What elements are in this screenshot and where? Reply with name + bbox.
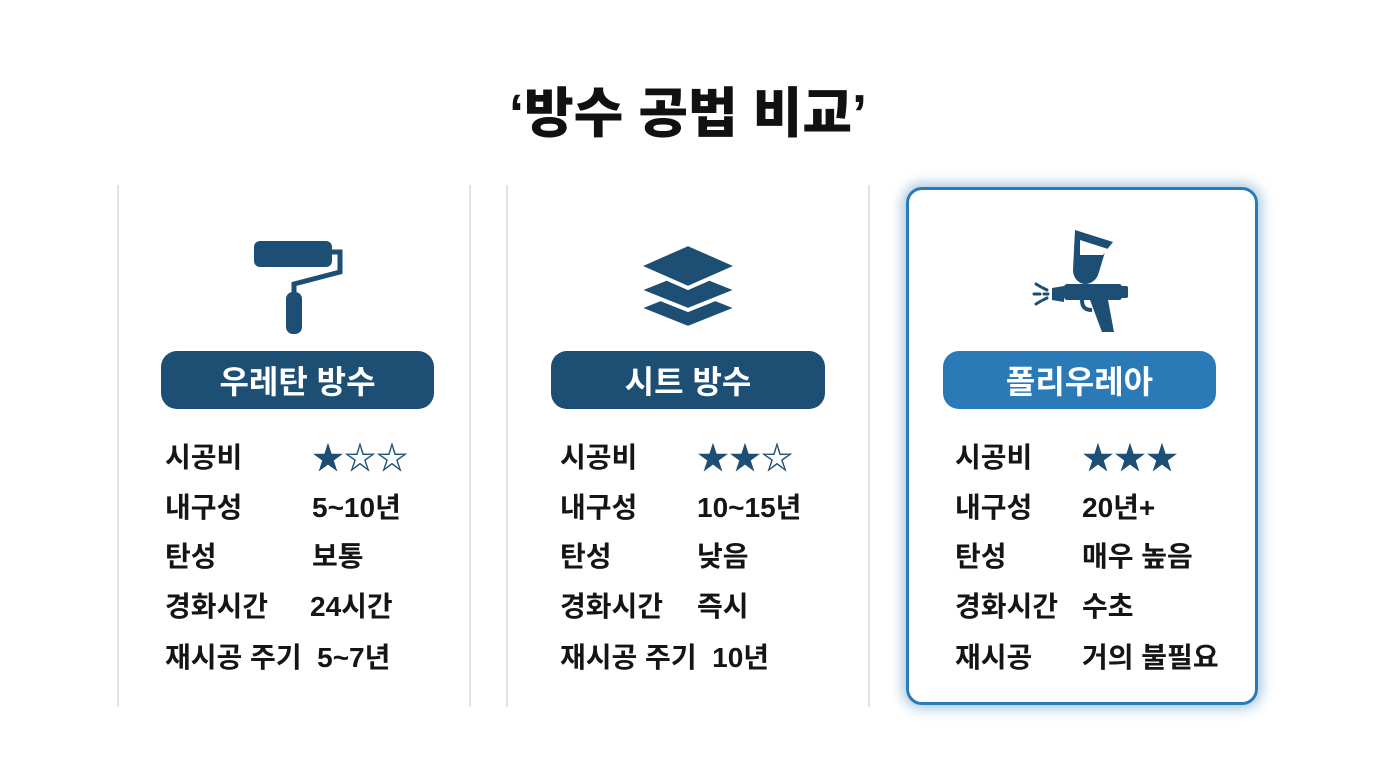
pill: polyurea: 폴리우레아 xyxy=(1006,364,1153,400)
text block: polyurea specs: 시공비 xyxy=(955,442,1032,473)
text block: urethane specs: 보통 xyxy=(312,541,364,572)
text block: urethane specs: 경화시간 xyxy=(165,591,268,622)
text block: polyurea specs: 경화시간 xyxy=(955,591,1058,622)
text block: urethane specs: 5~10년 xyxy=(312,492,401,523)
icon: spray gun xyxy=(1032,230,1128,332)
text block: polyurea specs: 매우 높음 xyxy=(1082,541,1193,572)
text block: polyurea specs: 재시공 xyxy=(955,642,1032,673)
pill: sheet: 시트 방수 xyxy=(625,364,751,400)
icon: paint roller xyxy=(254,241,342,334)
text block: sheet specs: 재시공 주기 10년 xyxy=(560,642,769,673)
text block: sheet specs: 내구성 xyxy=(560,492,637,523)
text block: polyurea specs: 수초 xyxy=(1082,591,1134,622)
icon: layers xyxy=(643,246,733,326)
text block: polyurea specs xyxy=(955,440,1219,673)
panel: polyurea highlight card xyxy=(906,187,1258,705)
text block: sheet specs: 10~15년 xyxy=(697,492,801,523)
pill: polyurea xyxy=(943,351,1216,409)
text block: polyurea specs: 20년+ xyxy=(1082,492,1155,523)
text block: urethane specs: ★☆☆ xyxy=(312,440,408,476)
text block: urethane specs: 내구성 xyxy=(165,492,242,523)
text block: polyurea specs: 탄성 xyxy=(955,541,1007,572)
text block: sheet specs xyxy=(560,440,801,673)
pill: sheet xyxy=(551,351,825,409)
text block: urethane specs: 재시공 주기 5~7년 xyxy=(165,642,390,673)
text block: polyurea specs: 거의 불필요 xyxy=(1082,642,1219,673)
pill: urethane: 우레탄 방수 xyxy=(219,364,376,400)
text block: urethane specs: 탄성 xyxy=(165,541,217,572)
text block: polyurea specs: ★★★ xyxy=(1082,440,1178,476)
text block: urethane specs xyxy=(165,440,408,673)
text block: sheet specs: 낮음 xyxy=(697,541,749,572)
text block: sheet specs: 탄성 xyxy=(560,541,612,572)
text block: polyurea specs: 내구성 xyxy=(955,492,1032,523)
title: ‘방수 공법 비교’ xyxy=(509,84,867,144)
text block: urethane specs: 시공비 xyxy=(165,442,242,473)
text block: urethane specs: 24시간 xyxy=(310,591,393,622)
text block: sheet specs: 시공비 xyxy=(560,442,637,473)
text block: sheet specs: 즉시 xyxy=(697,591,749,622)
pill: urethane xyxy=(161,351,434,409)
text block: sheet specs: ★★☆ xyxy=(697,440,793,476)
text block: sheet specs: 경화시간 xyxy=(560,591,663,622)
